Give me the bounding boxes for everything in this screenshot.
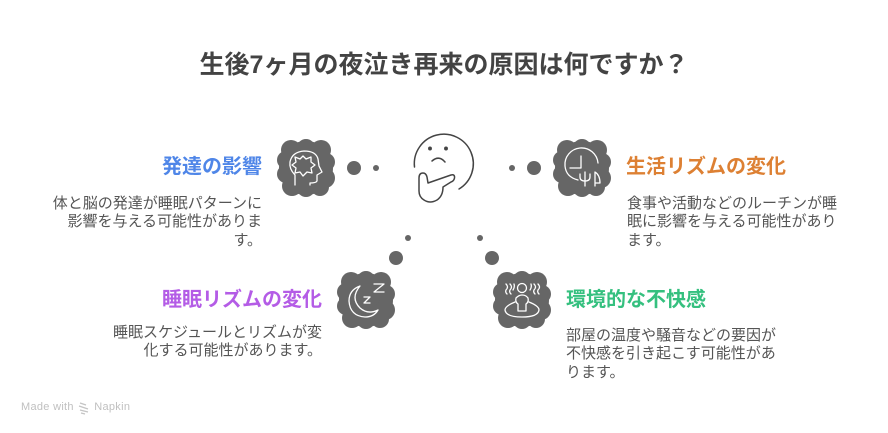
icon: person in steam (493, 271, 551, 329)
icon: head with brain burst (277, 139, 335, 197)
text: development: 体と脳の発達が睡眠パターンに (53, 195, 262, 212)
text: daily rhythm: 食事や活動などのルーチンが睡 (627, 195, 837, 212)
text: sleep rhythm (113, 324, 322, 359)
icon: thinking face (414, 134, 473, 202)
connector dots: lower left (389, 235, 411, 265)
connector dots: left (347, 161, 379, 175)
text: environment: 不快感を引き起こす可能性があ (566, 345, 776, 362)
text: daily rhythm: 眠に影響を与える可能性があり (627, 213, 837, 230)
text: daily rhythm (627, 195, 837, 249)
text: development (53, 195, 262, 249)
text: development: 影響を与える可能性がありま (67, 213, 262, 230)
watermark: Made with Napkin (21, 401, 130, 413)
text: environment: ります。 (566, 364, 625, 381)
text: environment (566, 327, 776, 381)
connector dots: right (509, 161, 541, 175)
title: 生後7ヶ月の夜泣き再来の原因は何ですか？ (200, 51, 688, 79)
text: sleep rhythm: 睡眠スケジュールとリズムが変 (113, 324, 322, 341)
text: sleep rhythm: 化する可能性があります。 (143, 342, 322, 359)
icon: crescent moon and Z letters (337, 271, 395, 329)
connector dots: lower right (477, 235, 499, 265)
icon: clock with cutlery (553, 139, 611, 197)
text: daily rhythm: ます。 (627, 232, 671, 249)
heading: sleep rhythm: 睡眠リズムの変化 (162, 289, 322, 311)
text: environment: 部屋の温度や騒音などの要因が (566, 327, 776, 344)
heading: environment: 環境的な不快感 (566, 289, 706, 311)
logo mark: Napkin (79, 403, 88, 414)
heading: development: 発達の影響 (162, 156, 262, 178)
text: development: す。 (233, 232, 262, 249)
heading: daily rhythm: 生活リズムの変化 (626, 156, 786, 178)
